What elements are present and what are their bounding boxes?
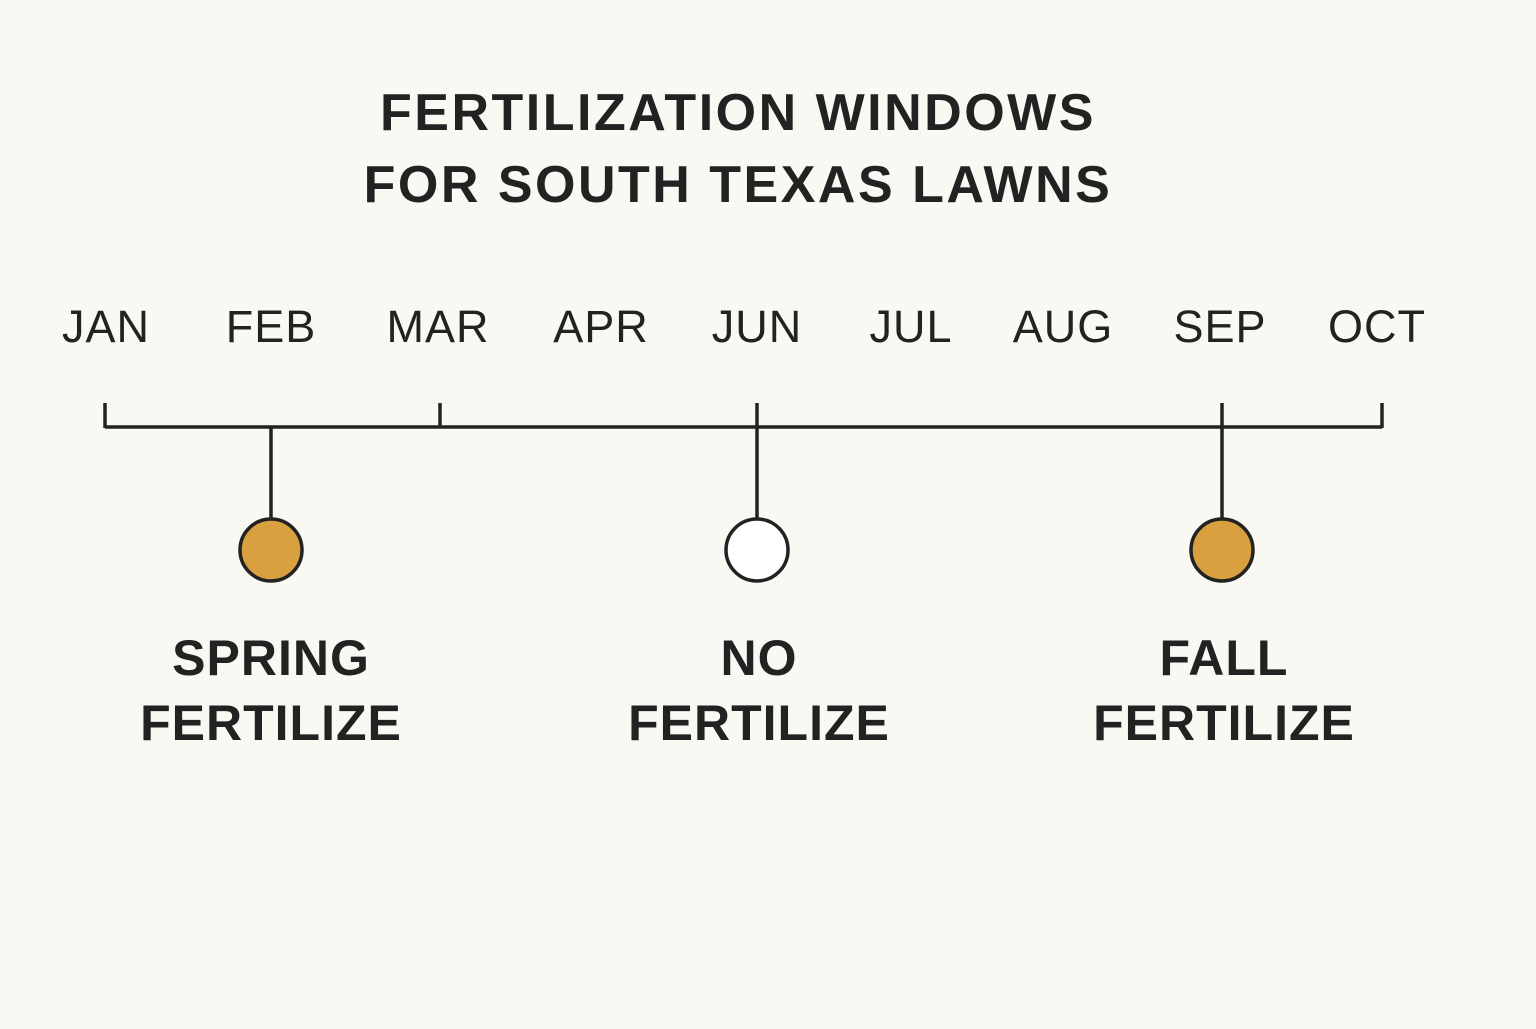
month labels	[62, 301, 1426, 352]
marker: no fertilize	[726, 427, 788, 581]
label: fall fertilize: FALL	[1160, 630, 1288, 686]
label: spring fertilize	[140, 630, 402, 751]
month labels: MAR	[386, 301, 490, 352]
label: spring fertilize: FERTILIZE	[140, 695, 402, 751]
month labels: JAN	[62, 301, 150, 352]
month labels: JUL	[869, 301, 953, 352]
title: FOR SOUTH TEXAS LAWNS	[364, 156, 1112, 214]
month labels: FEB	[226, 301, 316, 352]
title: FERTILIZATION WINDOWS	[380, 84, 1096, 142]
label: no fertilize	[628, 630, 890, 751]
month labels: AUG	[1013, 301, 1113, 352]
marker: fall fertilize	[1191, 427, 1253, 581]
label: no fertilize: NO	[720, 630, 798, 686]
month labels: SEP	[1173, 301, 1267, 352]
label: no fertilize: FERTILIZE	[628, 695, 890, 751]
title	[364, 84, 1112, 214]
timeline axis	[105, 403, 1382, 428]
label: fall fertilize: FERTILIZE	[1093, 695, 1355, 751]
marker: spring fertilize	[240, 427, 302, 581]
label: spring fertilize: SPRING	[172, 630, 370, 686]
month labels: JUN	[712, 301, 802, 352]
label: fall fertilize	[1093, 630, 1355, 751]
month labels: APR	[553, 301, 649, 352]
month labels: OCT	[1328, 301, 1426, 352]
